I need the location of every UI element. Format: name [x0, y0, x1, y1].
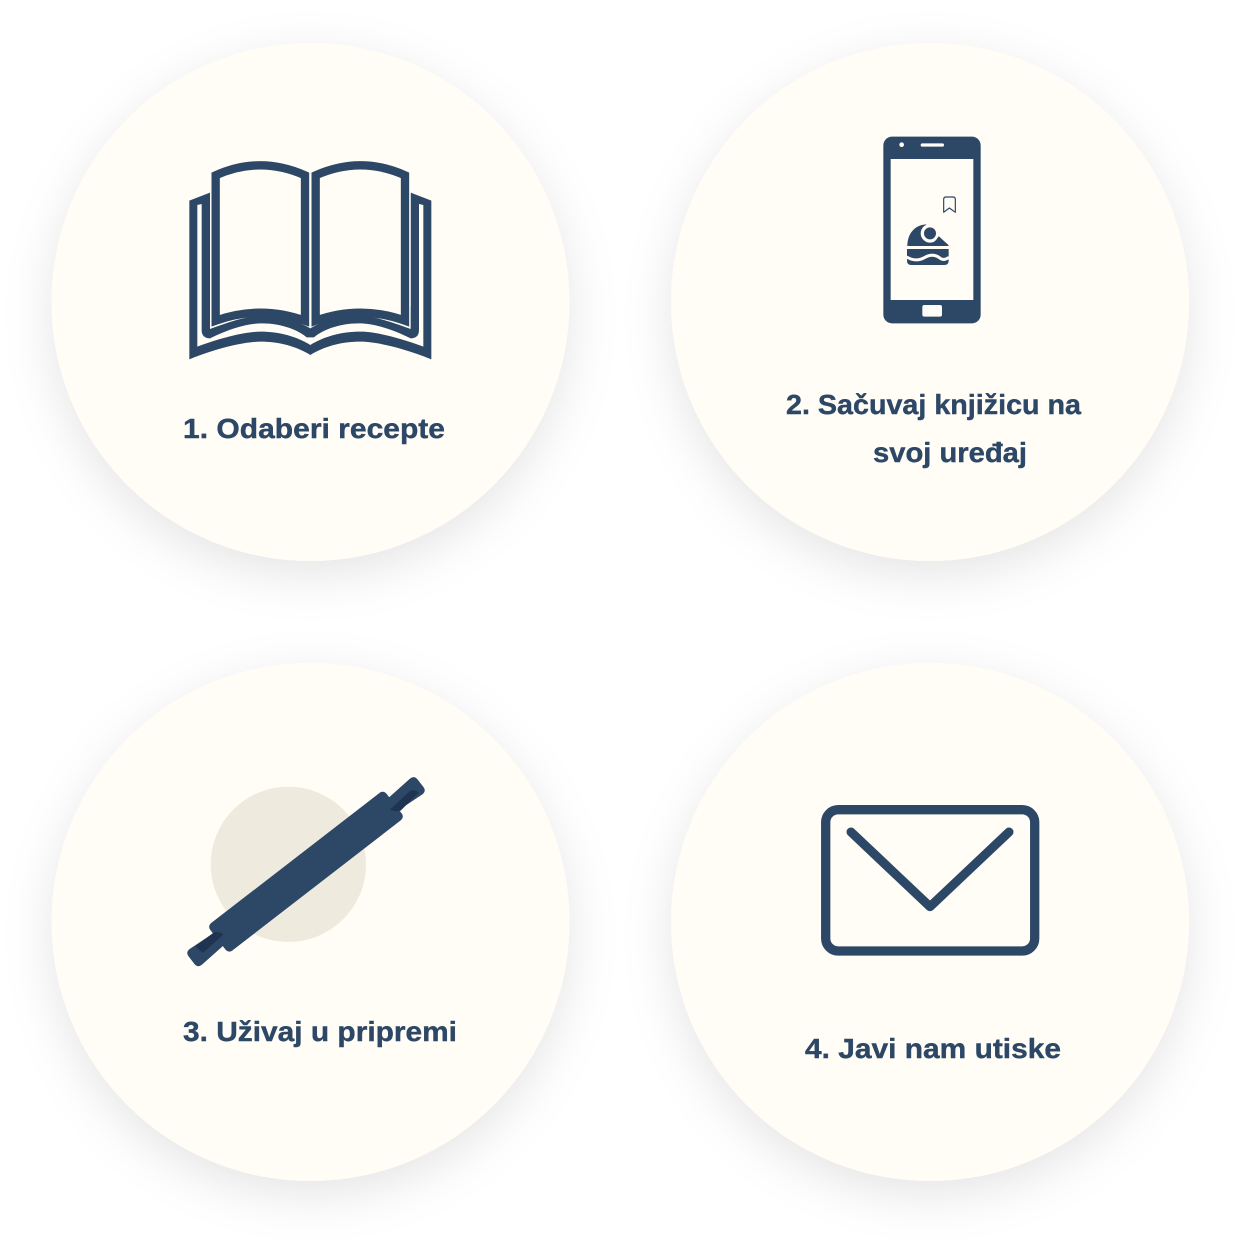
icon: envelope: [826, 810, 1035, 951]
icon: dough circle and rolling pin: [181, 769, 431, 974]
circle background step 4: [671, 663, 1189, 1181]
circle background step 3: [52, 663, 570, 1181]
heading: step 1: 1. Odaberi recepte: [183, 413, 445, 444]
panel: step 3 enjoy preparing: [52, 663, 570, 1181]
heading: step 3: 3. Uživaj u pripremi: [183, 1016, 457, 1047]
panel: step 2 save booklet: [671, 43, 1189, 561]
circle background step 1: [52, 43, 570, 561]
icon: open book: [189, 165, 431, 359]
panel: step 4 send impressions: [671, 663, 1189, 1181]
heading: step 2: 2. Sačuvaj knjižicu na: [786, 389, 1082, 420]
icon: smartphone with cake: [883, 137, 981, 323]
heading: step 2: svoj uređaj: [873, 437, 1027, 468]
heading: step 2: [786, 389, 1082, 468]
heading: step 4: 4. Javi nam utiske: [805, 1033, 1061, 1064]
panel: step 1 choose recipes: [52, 43, 570, 561]
circle background step 2: [671, 43, 1189, 561]
